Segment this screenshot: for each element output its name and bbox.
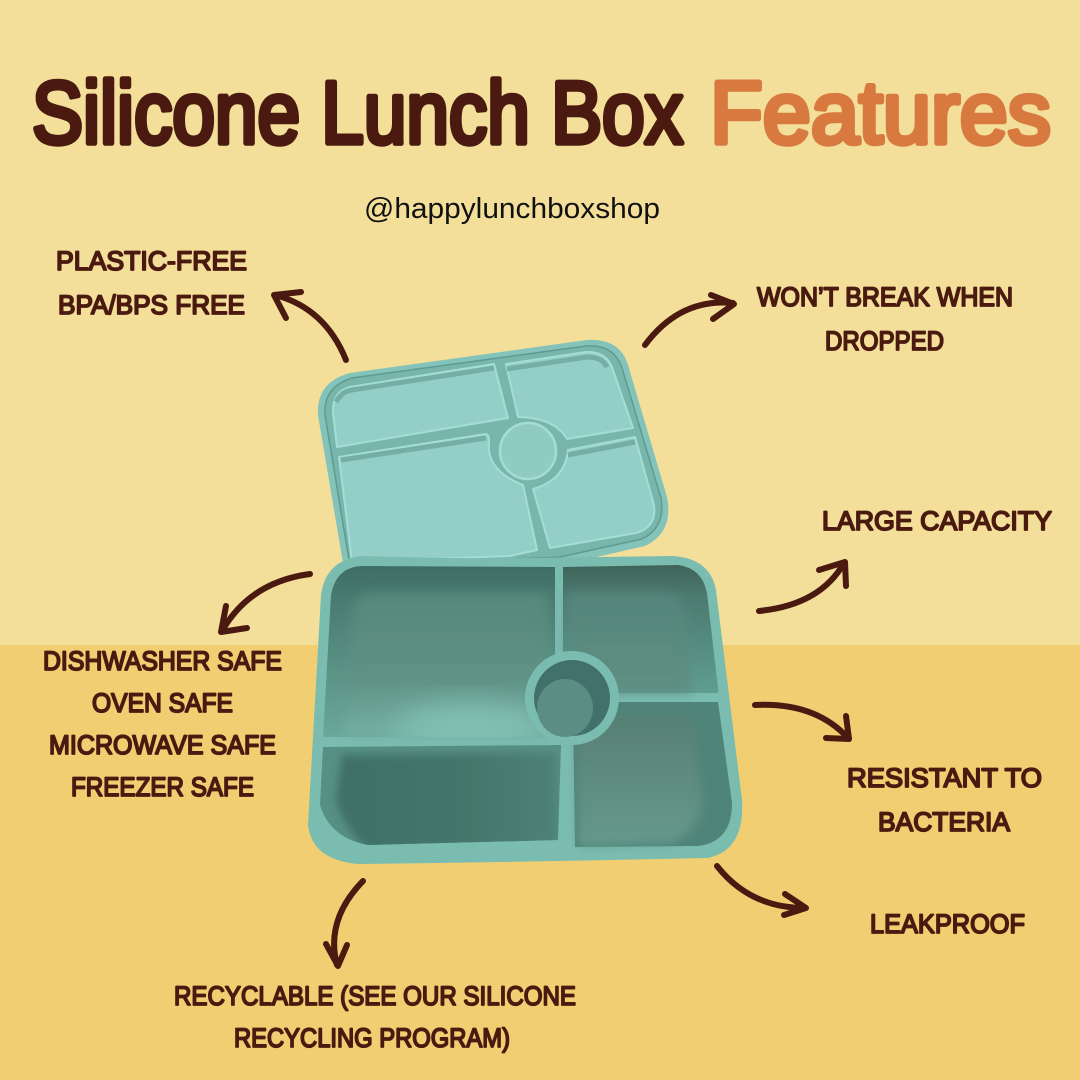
lid rim groove	[325, 346, 662, 566]
arrow: to large capacity	[759, 562, 846, 611]
label: won't break when dropped: DROPPED	[825, 326, 944, 356]
label: leakproof: LEAKPROOF	[870, 909, 1025, 939]
label: resistant to bacteria	[847, 763, 1042, 837]
centre cup floor	[537, 679, 593, 737]
arrow: to won't break	[645, 295, 734, 345]
title	[32, 63, 1051, 162]
label: safety list: DISHWASHER SAFE	[43, 646, 282, 676]
lunch box base	[308, 556, 742, 864]
label: resistant to bacteria: BACTERIA	[878, 807, 1010, 837]
handle text: @happylunchboxshop	[364, 193, 660, 225]
label: plastic-free: PLASTIC-FREE	[56, 246, 247, 276]
lid compartment: bottom right	[533, 437, 654, 548]
label: resistant to bacteria: RESISTANT TO	[847, 763, 1042, 793]
label: large capacity: LARGE CAPACITY	[822, 506, 1052, 536]
centre cup well	[534, 660, 610, 736]
lid centre ring	[500, 423, 556, 479]
well: lower right	[573, 702, 732, 847]
label: safety list: MICROWAVE SAFE	[49, 730, 276, 760]
well: large upper left	[323, 566, 555, 752]
label: recyclable: RECYCLING PROGRAM)	[234, 1023, 510, 1053]
lid compartment: bottom left	[339, 434, 537, 562]
label: safety list: FREEZER SAFE	[71, 772, 254, 802]
arrow: to leakproof	[717, 866, 806, 915]
lunch box lid	[318, 340, 668, 575]
arrow: to plastic-free	[274, 292, 346, 360]
title: dark words: Silicone Lunch Box	[32, 63, 683, 162]
well: upper right	[563, 565, 718, 693]
lid compartment: top right	[506, 352, 633, 439]
base outer silhouette	[308, 556, 742, 864]
label: plastic-free	[56, 246, 247, 320]
label: won't break when dropped	[757, 282, 1013, 356]
arrow: to resistant to bacteria	[755, 705, 849, 739]
label: plastic-free: BPA/BPS FREE	[58, 290, 245, 320]
background: upper pale yellow band	[0, 0, 1080, 645]
label: safety list	[43, 646, 282, 802]
background: lower golden band	[0, 645, 1080, 1080]
well: lower left	[320, 745, 561, 850]
label: safety list: OVEN SAFE	[92, 688, 233, 718]
arrow: to recyclable	[326, 881, 363, 966]
lid outer silhouette	[318, 340, 668, 575]
label: recyclable	[174, 981, 576, 1053]
lid compartment: top left	[333, 364, 508, 447]
title: orange word: Features	[710, 63, 1051, 162]
label: won't break when dropped: WON’T BREAK WHEN	[757, 282, 1013, 312]
arrow: to dishwasher safe	[221, 574, 310, 632]
label: recyclable: RECYCLABLE (SEE OUR SILICONE	[174, 981, 576, 1011]
centre cup rim	[525, 651, 619, 745]
